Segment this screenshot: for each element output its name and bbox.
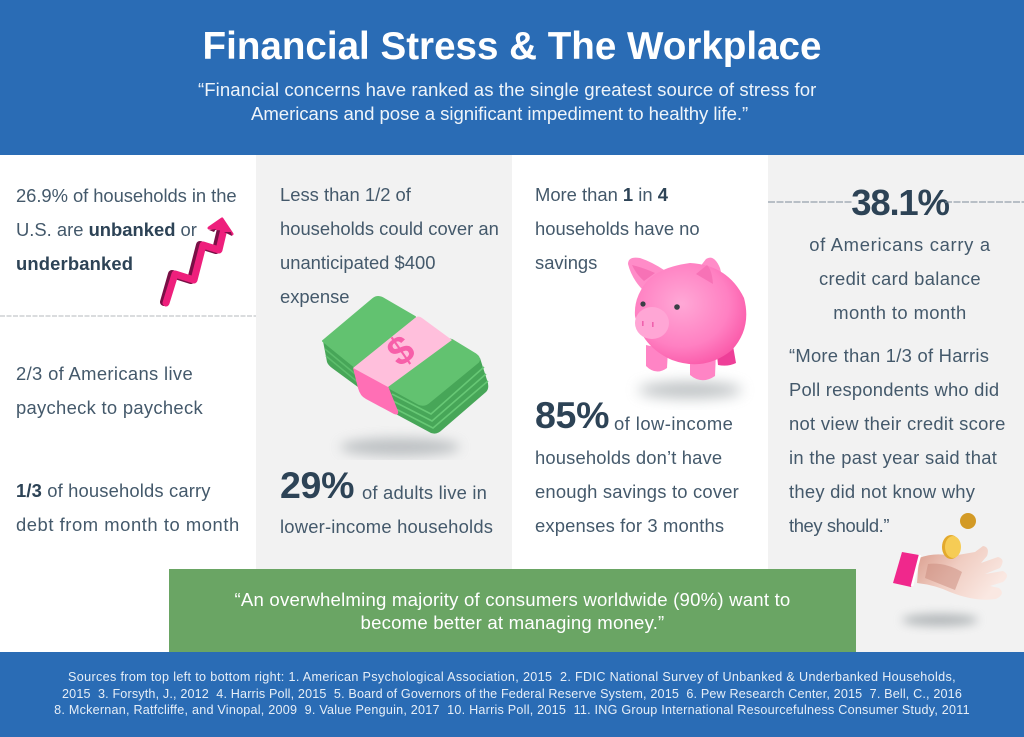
sources: Sources from top left to bottom right: 1. American Psychological Association, 2015 2. FDIC National Survey of Unbanked & Underbanked Households, xyxy=(68,670,956,684)
ears and body xyxy=(628,258,664,292)
stat: carry debt: 1/3 of households carry xyxy=(16,480,211,501)
stat: low-income savings: 85% xyxy=(535,394,609,436)
footer band xyxy=(0,652,1024,737)
icon: stack of money: $ xyxy=(379,327,423,375)
snout xyxy=(635,307,669,339)
intro quote xyxy=(198,79,816,124)
stat: lower-income adults: 29% xyxy=(280,464,354,506)
stat: no savings xyxy=(535,184,700,273)
callout: consumers want to manage money: “An overwhelming majority of consumers worldwide (90%) want to xyxy=(235,589,790,610)
panel: column 1 text xyxy=(16,185,240,535)
stat: no savings: households have no xyxy=(535,218,700,239)
stat: unbanked households xyxy=(16,185,237,274)
title: Financial Stress & The Workplace xyxy=(203,25,821,68)
stat: credit card balance xyxy=(809,182,991,323)
sources: 2015 3. Forsyth, J., 2012 4. Harris Poll, 2015 5. Board of Governors of the Federal Reserve System, 2015 6. Pew Research Center, 2015 7. Bell, C., 2016 xyxy=(62,687,962,701)
stat: credit card balance: credit card balance xyxy=(819,268,981,289)
panel: column 2 text xyxy=(280,184,499,537)
quote: Harris Poll: Poll respondents who did xyxy=(789,379,999,400)
sources: 8. Mckernan, Ratfcliffe, and Vinopal, 2009 9. Value Penguin, 2017 10. Harris Poll, 2015 11. ING Group International Resourcefulness Consumer Study, 2011 xyxy=(54,703,970,717)
callout: consumers want to manage money: become better at managing money.” xyxy=(361,612,664,633)
stat: no savings: More than 1 in 4 xyxy=(535,184,668,205)
quote: Harris Poll: in the past year said that xyxy=(789,447,997,468)
icon: piggy bank xyxy=(628,258,746,406)
stat: low-income savings: expenses for 3 months xyxy=(535,515,724,536)
stat: lower-income adults: of adults live in xyxy=(362,482,487,503)
stat: unbanked households: U.S. are unbanked or xyxy=(16,219,197,240)
icon: stack of money xyxy=(322,296,488,460)
stat: low-income savings: enough savings to cover xyxy=(535,481,739,502)
stat: paycheck to paycheck: paycheck to paycheck xyxy=(16,397,203,418)
stat: $400 expense: expense xyxy=(280,286,350,307)
right stack top xyxy=(388,339,479,405)
panel: column 3 text xyxy=(535,184,739,536)
stat: lower-income adults: lower-income households xyxy=(280,516,493,537)
icon: rising arrow xyxy=(160,217,234,306)
sources xyxy=(54,670,970,717)
header band xyxy=(0,0,1024,155)
stat: no savings: savings xyxy=(535,252,597,273)
stat: credit card balance: 38.1% xyxy=(851,182,949,223)
quote: Harris Poll: they should.” xyxy=(789,515,889,536)
quote: Harris Poll: “More than 1/3 of Harris xyxy=(789,345,989,366)
band top xyxy=(353,316,452,387)
panel: column 2 background xyxy=(256,155,512,652)
stat: credit card balance: month to month xyxy=(833,302,967,323)
panel: column 4 background xyxy=(768,155,1024,652)
legs xyxy=(716,340,736,366)
stat: low-income savings xyxy=(535,394,739,536)
stat: $400 expense xyxy=(280,184,499,307)
intro quote: “Financial concerns have ranked as the single greatest source of stress for xyxy=(198,79,816,100)
stat: unbanked households: underbanked xyxy=(16,253,133,274)
callout: consumers want to manage money xyxy=(169,569,856,652)
stat: unbanked households: 26.9% of households in the xyxy=(16,185,237,206)
stat: $400 expense: Less than 1/2 of xyxy=(280,184,411,205)
band front xyxy=(353,368,398,415)
right stack side xyxy=(388,358,488,434)
stat: lower-income adults xyxy=(280,464,493,537)
stat: credit card balance: of Americans carry a xyxy=(809,234,991,255)
stat: paycheck to paycheck: 2/3 of Americans live xyxy=(16,363,193,384)
panel: column 4 text xyxy=(789,182,1006,536)
quote: Harris Poll xyxy=(789,345,1006,536)
stat: low-income savings: households don’t have xyxy=(535,447,722,468)
icon: hand with coins xyxy=(893,513,1007,632)
stat: $400 expense: households could cover an xyxy=(280,218,499,239)
left stack top xyxy=(323,297,415,367)
stat: carry debt: debt from month to month xyxy=(16,514,240,535)
stat: $400 expense: unanticipated $400 xyxy=(280,252,435,273)
quote: Harris Poll: not view their credit score xyxy=(789,413,1006,434)
quote: Harris Poll: they did not know why xyxy=(789,481,975,502)
left stack side xyxy=(323,340,400,390)
intro quote: Americans and pose a significant impediment to healthy life.” xyxy=(251,103,748,124)
stat: paycheck to paycheck xyxy=(16,363,203,418)
stat: low-income savings: of low-income xyxy=(614,413,733,434)
stat: carry debt xyxy=(16,480,240,535)
